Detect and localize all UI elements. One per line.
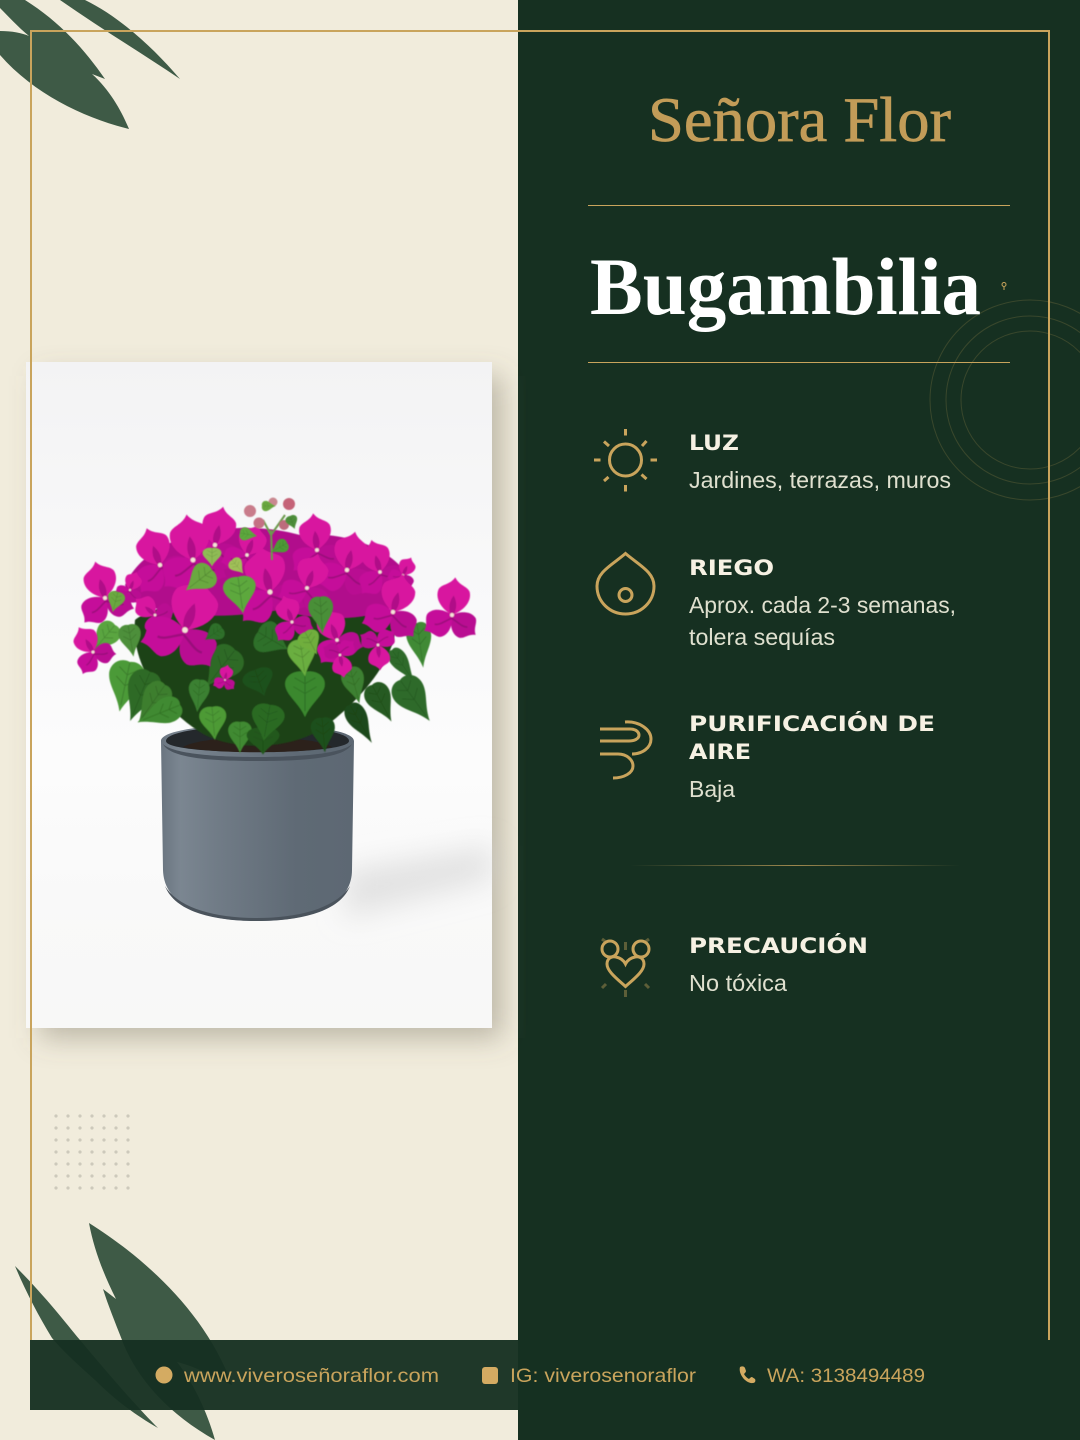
text: riego value: Aprox. cada 2-3 semanas, (689, 592, 956, 618)
icon: sun (594, 429, 657, 492)
photo: potted bugambilia (26, 362, 502, 1038)
heading: purificación de aire: AIRE (689, 740, 751, 764)
text: aire value: Baja (689, 776, 735, 802)
divider (588, 362, 1010, 363)
text: precaución value: No tóxica (689, 970, 787, 996)
icon: instagram square (482, 1367, 498, 1384)
heading: luz: LUZ (689, 431, 739, 455)
pot cast shadow (345, 845, 492, 918)
heading: precaución: PRECAUCIÓN (689, 933, 868, 958)
footer bar (30, 1340, 1050, 1410)
decoration: concentric circles (930, 300, 1080, 500)
decoration: top-left leaves (0, 0, 180, 129)
heading: purificación de aire: PURIFICACIÓN DE (689, 711, 935, 736)
plant bracts (56, 499, 488, 695)
text: luz value: Jardines, terrazas, muros (689, 467, 951, 493)
divider (588, 205, 1010, 206)
plant name: Bugambilia (590, 241, 981, 332)
plant top leaves and buds (104, 498, 335, 660)
section: luz (594, 429, 951, 493)
panel: dark right column (518, 0, 1080, 1440)
section: purificación de aire (600, 711, 942, 802)
text: whatsapp: WA: 3138494489 (767, 1365, 925, 1387)
pot (161, 724, 354, 921)
icon: wind (600, 722, 651, 778)
icon: web dot (156, 1366, 172, 1384)
icon: heart with rays (602, 939, 649, 997)
icon: phone (740, 1366, 755, 1383)
icon: small bulb (1002, 282, 1006, 290)
footer contacts (156, 1365, 925, 1387)
section: riego (597, 554, 962, 650)
icon: water drop (597, 554, 654, 614)
photo shadow (40, 376, 502, 1038)
section: precaución (602, 933, 868, 997)
brand title: Señora Flor (648, 84, 951, 155)
heading: riego: RIEGO (689, 556, 774, 580)
photo background (26, 362, 492, 1028)
decoration: bottom-left leaves (15, 1223, 232, 1440)
text: riego value: tolera sequías (689, 624, 835, 650)
text: website: www.viveroseñoraflor.com (183, 1365, 439, 1387)
text: instagram: IG: viverosenoraflor (510, 1365, 697, 1387)
decoration: dot grid (54, 1114, 130, 1190)
plant foliage (84, 598, 443, 755)
